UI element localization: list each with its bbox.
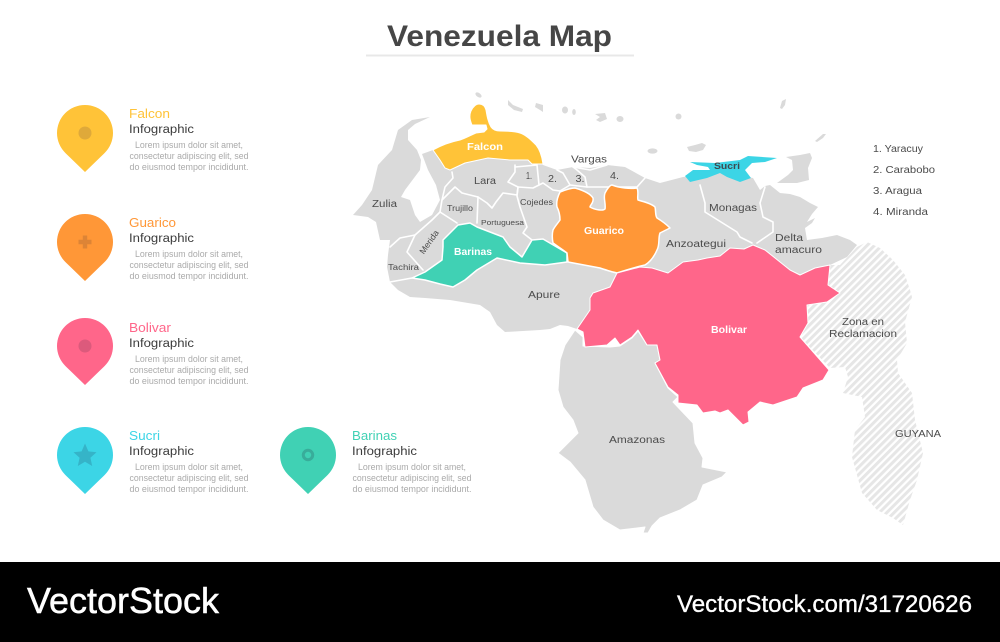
region: Amazonas: [558, 330, 727, 533]
legend item: Bolivar: Bolivar: [129, 321, 171, 335]
state labels: Zona en: [842, 317, 884, 328]
legend item: Bolivar: consectetur adipiscing elit, sed: [130, 365, 249, 375]
state labels: 2.: [548, 174, 557, 185]
legend item: Bolivar: do eiusmod tempor incididunt.: [130, 376, 248, 386]
icon: Barinas pin: [280, 427, 336, 494]
icon: Sucri pin: [57, 427, 113, 494]
state labels: Portuguesa: [481, 218, 525, 227]
legend item: Bolivar: [57, 318, 249, 386]
legend item: Barinas: Infographic: [352, 446, 417, 458]
legend item: Barinas: Barinas: [352, 429, 397, 443]
state labels: Merida: [417, 228, 441, 256]
state labels: 4.: [610, 171, 619, 182]
legend item: Barinas: Lorem ipsum dolor sit amet,: [358, 462, 466, 472]
state labels: Reclamacion: [829, 329, 897, 340]
state labels: Trujillo: [447, 203, 473, 213]
state labels: [372, 142, 941, 446]
state labels: Monagas: [709, 203, 757, 214]
state labels: Tachira: [388, 263, 420, 272]
state labels: Zulia: [372, 199, 397, 210]
legend item: Guarico: [57, 214, 249, 281]
state labels: Guarico: [584, 226, 624, 237]
state labels: Vargas: [571, 154, 607, 166]
legend item: Sucri: Infographic: [129, 446, 194, 458]
guyana hatched territory: [800, 242, 923, 525]
legend item: Falcon: consectetur adipiscing elit, sed: [130, 151, 249, 161]
legend item: Sucri: [57, 427, 249, 494]
footer bar: [0, 562, 1000, 642]
numbered state list: [873, 144, 935, 218]
state labels: GUYANA: [895, 429, 941, 440]
state borders: [390, 165, 773, 282]
legend item: Guarico: consectetur adipiscing elit, sed: [130, 260, 249, 270]
legend item: Sucri: Sucri: [129, 429, 160, 443]
legend item: Falcon: Lorem ipsum dolor sit amet,: [135, 140, 243, 150]
region: Barinas: [412, 223, 567, 287]
legend item: Falcon: Falcon: [129, 107, 170, 121]
numbered state list: 2. Carabobo: [873, 165, 935, 176]
legend item: Sucri: do eiusmod tempor incididunt.: [130, 484, 248, 494]
numbered state list: 4. Miranda: [873, 207, 929, 218]
legend item: Barinas: [280, 427, 472, 494]
legend item: Guarico: Infographic: [129, 233, 194, 245]
state labels: Anzoategui: [666, 239, 726, 250]
icon: Falcon pin: [57, 105, 113, 172]
legend item: Guarico: Lorem ipsum dolor sit amet,: [135, 249, 243, 259]
icon: Bolivar pin: [57, 318, 113, 385]
legend item: Barinas: do eiusmod tempor incididunt.: [352, 484, 472, 494]
legend item: Bolivar: Infographic: [129, 338, 194, 350]
state labels: Bolivar: [711, 325, 747, 336]
state labels: Amazonas: [609, 435, 665, 446]
legend item: Bolivar: Lorem ipsum dolor sit amet,: [135, 354, 243, 364]
region: Falcon: [433, 104, 543, 170]
numbered state list: 3. Aragua: [873, 186, 923, 197]
legend item: Falcon: [57, 105, 249, 172]
state labels: Cojedes: [520, 197, 553, 207]
region: Guarico: [552, 185, 670, 273]
footer bar: VectorStock.com/31720626: [677, 591, 972, 618]
legend item: Barinas: consectetur adipiscing elit, sed: [352, 473, 472, 483]
state labels: Lara: [474, 176, 496, 187]
state labels: amacuro: [775, 245, 823, 256]
state labels: 3.: [576, 174, 584, 185]
islands: [474, 91, 826, 183]
legend item: Falcon: Infographic: [129, 124, 194, 136]
icon: Guarico pin: [57, 214, 113, 281]
legend item: Guarico: do eiusmod tempor incididunt.: [130, 271, 248, 281]
footer bar: VectorStock: [27, 580, 220, 621]
legend item: Guarico: Guarico: [129, 216, 176, 230]
state labels: 1.: [526, 171, 532, 182]
mainland grey states: [353, 117, 857, 332]
title: Venezuela Map: [387, 20, 612, 53]
legend item: Falcon: do eiusmod tempor incididunt.: [130, 162, 248, 172]
region: Bolivar: [577, 245, 840, 425]
state labels: Barinas: [454, 247, 492, 258]
legend item: Sucri: consectetur adipiscing elit, sed: [130, 473, 249, 483]
state labels: Apure: [528, 290, 561, 301]
state labels: Sucri: [714, 161, 740, 172]
region: Sucri: [685, 156, 777, 182]
numbered state list: 1. Yaracuy: [873, 144, 923, 155]
state labels: Delta: [775, 233, 804, 244]
state labels: Falcon: [467, 142, 503, 153]
legend item: Sucri: Lorem ipsum dolor sit amet,: [135, 462, 243, 472]
map of Venezuela: [353, 91, 941, 533]
